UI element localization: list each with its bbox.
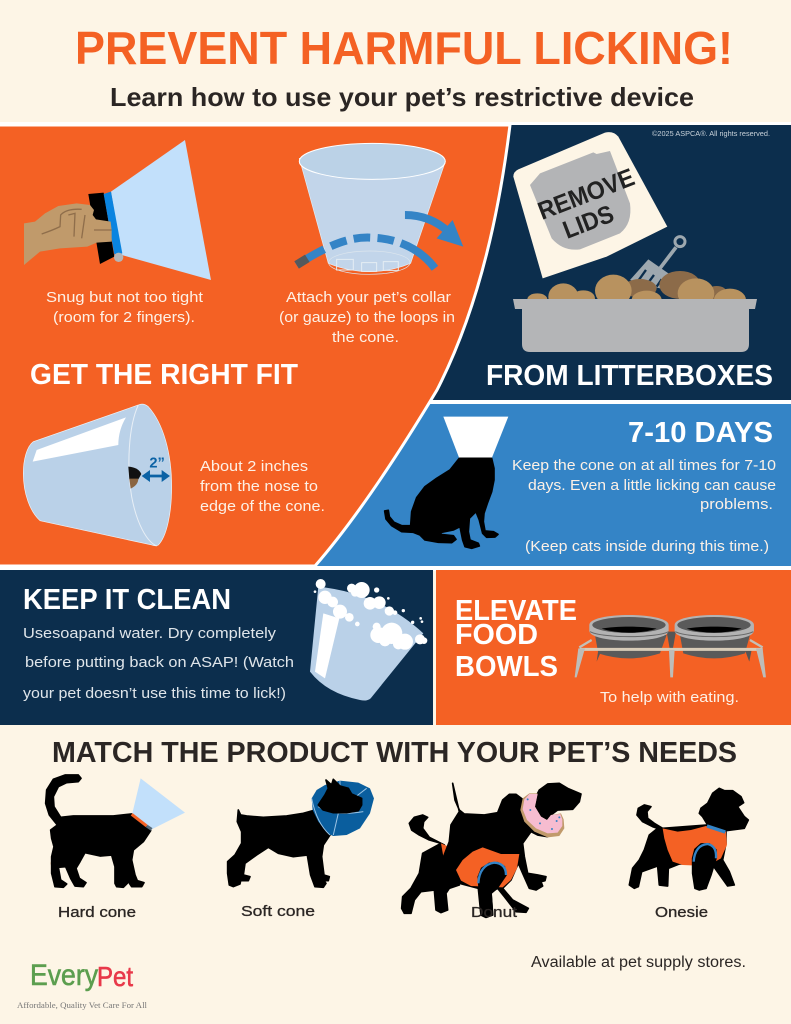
text: attach collar <box>279 289 455 346</box>
text: 7-10 days body: days. Even a little licking can cause <box>528 477 776 494</box>
logo: EveryPet: Pet <box>97 961 133 992</box>
text: 2 inches: edge of the cone. <box>200 498 325 515</box>
heading: from litterboxes: FROM LITTERBOXES <box>486 360 773 392</box>
text: 2 inches: from the nose to <box>200 478 318 495</box>
label: hard cone: Hard cone <box>58 904 136 921</box>
panel: keep it clean <box>0 570 433 725</box>
label: soft cone: Soft cone <box>241 903 315 920</box>
icon: sitting dog with cone <box>385 417 508 548</box>
text: available at pet supply stores: Available at pet supply stores. <box>531 954 746 971</box>
icon: cone side view with 2 inch gap <box>23 404 172 546</box>
text: attach collar: the cone. <box>332 329 399 346</box>
heading: elevate food bowls: ELEVATE <box>455 595 577 627</box>
copyright: ©2025 ASPCA®. All rights reserved. <box>652 129 770 138</box>
icon: cone side view with 2 inch gap: 2” <box>149 455 165 471</box>
text: keep it clean body: your pet doesn’t use this time to lick!) <box>23 685 286 702</box>
text: 7-10 days body: Keep the cone on at all times for 7-10 <box>512 457 776 474</box>
text: remove lids: LIDS <box>559 200 618 245</box>
heading: elevate food bowls <box>455 595 577 683</box>
icon: fluffy dog in onesie <box>629 788 748 890</box>
text: snug fit: Snug but not too tight <box>46 289 204 306</box>
text: to help with eating: To help with eating. <box>600 689 739 706</box>
panel: elevate food bowls <box>436 570 791 725</box>
text: snug fit: (room for 2 fingers). <box>53 309 195 326</box>
text: attach collar: (or gauze) to the loops in <box>279 309 455 326</box>
icon: cat with hard cone <box>46 775 185 887</box>
subtitle: Learn how to use your pet’s restrictive device <box>110 82 694 112</box>
heading: keep it clean: KEEP IT CLEAN <box>23 584 231 616</box>
heading: 7-10 days: 7-10 DAYS <box>628 417 773 449</box>
label: donut: Donut <box>471 904 518 921</box>
heading: elevate food bowls: BOWLS <box>455 651 558 683</box>
icon: litter clumps <box>527 271 746 299</box>
icon: dog with soft cone <box>228 779 374 887</box>
product: soft cone <box>228 779 374 920</box>
text: 7-10 days body: problems. <box>700 496 773 513</box>
text: 7-10 days body: (Keep cats inside during this time.) <box>525 538 769 555</box>
icon: litter tray <box>513 299 757 352</box>
label: onesie: Onesie <box>655 904 708 921</box>
icon: litter scoop <box>630 237 685 288</box>
panel: from litterboxes <box>430 125 791 400</box>
icon: soapy cone <box>310 579 427 701</box>
panel: 7-10 days <box>300 404 791 566</box>
text: 7-10 days body <box>512 457 776 555</box>
text: 2 inches: About 2 inches <box>200 458 308 475</box>
logo: EveryPet: Every <box>30 959 98 992</box>
text: keep it clean body: Usesoapand water. Dry completely <box>23 625 277 642</box>
panel: get the right fit <box>0 125 510 566</box>
icon: cone with collar loops <box>297 143 463 274</box>
icon: dog with donut collar <box>402 783 581 917</box>
heading: elevate food bowls: FOOD <box>455 619 538 651</box>
text: keep it clean body: before putting back on ASAP! (Watch <box>25 654 294 671</box>
text: attach collar: Attach your pet’s collar <box>286 289 451 306</box>
heading: get the right fit: GET THE RIGHT FIT <box>30 359 298 391</box>
text: snug fit <box>46 289 204 326</box>
logo tagline: Affordable, Quality Vet Care For All <box>17 1001 148 1010</box>
product: hard cone <box>46 775 185 921</box>
logo: EveryPet <box>17 959 148 1010</box>
text: remove lids: REMOVE <box>534 163 638 226</box>
title: PREVENT HARMFUL LICKING! <box>75 22 733 74</box>
icon: lid card <box>513 132 667 278</box>
product: onesie <box>629 788 748 921</box>
text: keep it clean body <box>23 625 294 702</box>
icon: hand checking cone fit <box>24 140 211 280</box>
icon: raised food bowls <box>575 615 766 677</box>
text: 2 inches <box>200 458 325 515</box>
product: donut <box>402 783 581 921</box>
heading: match the product: MATCH THE PRODUCT WITH YOUR PET’S NEEDS <box>52 737 737 769</box>
